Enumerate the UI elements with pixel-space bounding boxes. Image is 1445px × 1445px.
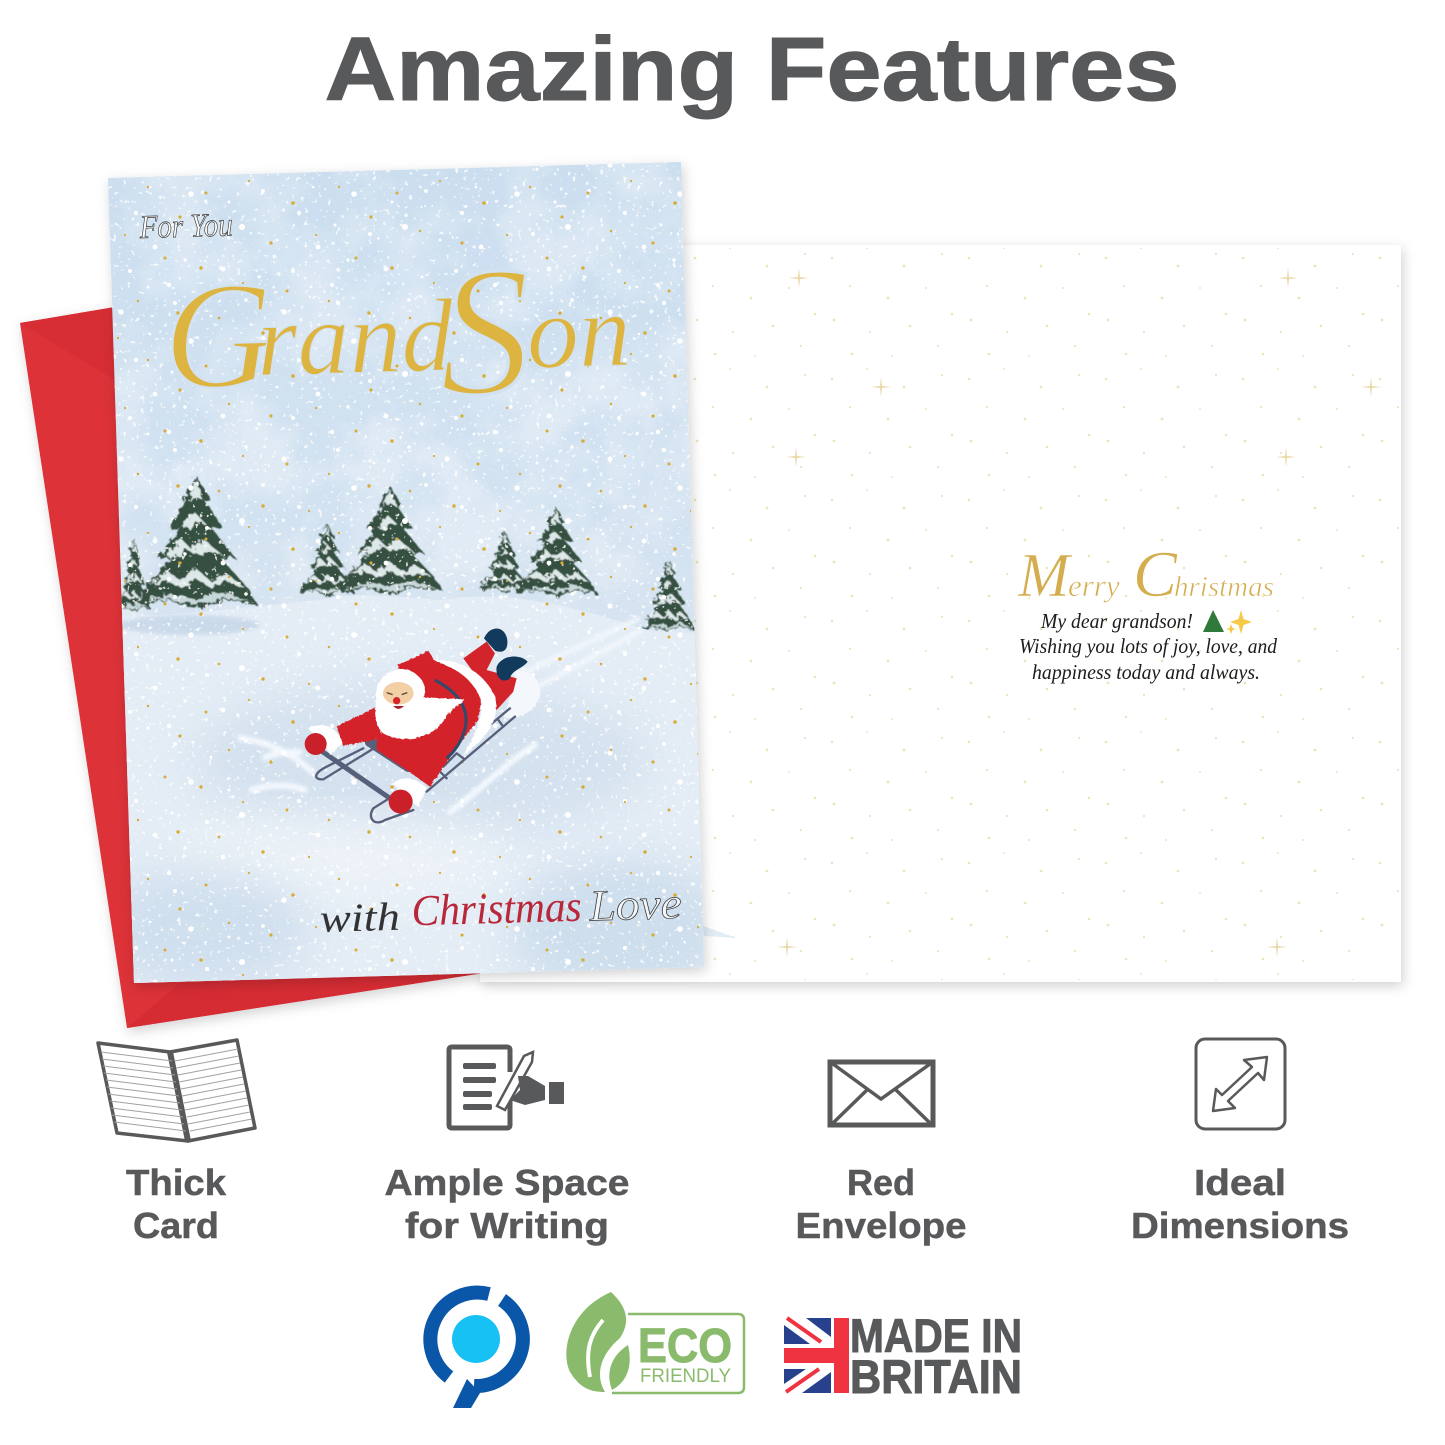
with christmas love: Love <box>588 879 682 930</box>
card fold sliver <box>703 926 737 938</box>
badge: eco friendly: FRIENDLY <box>640 1366 731 1387</box>
label <box>1131 1162 1349 1246</box>
mittens <box>305 733 327 755</box>
snow spray <box>503 670 541 718</box>
message heading: erry <box>1068 568 1127 603</box>
face <box>383 682 414 705</box>
snow ground <box>100 595 720 990</box>
message heading: M <box>1017 542 1073 610</box>
gold speckle <box>100 160 710 990</box>
title: Amazing Features <box>324 20 1180 120</box>
message body: Wishing you lots of joy, love, and <box>1019 634 1277 658</box>
label <box>796 1162 966 1246</box>
feature: ample space <box>384 1047 630 1246</box>
grandson heading: on <box>525 273 632 391</box>
red envelope <box>20 307 490 1028</box>
badge: blue logo <box>430 1293 523 1408</box>
gold stars <box>777 268 1381 957</box>
label: Thick <box>126 1162 227 1203</box>
grandson heading: G <box>161 250 276 421</box>
with christmas love: with <box>319 894 400 941</box>
card front <box>90 160 730 1000</box>
speckle background <box>684 248 1399 980</box>
right arm <box>337 707 382 746</box>
badge: made in britain <box>784 1309 1022 1403</box>
badge: eco friendly: ECO <box>638 1320 732 1373</box>
feature: ideal dimensions <box>1131 1039 1349 1246</box>
trees <box>118 475 695 632</box>
card inside panel <box>480 245 1401 982</box>
santa suit <box>377 651 482 787</box>
icon: union flag <box>784 1318 849 1393</box>
feature: thick card <box>98 1040 255 1246</box>
icon: envelope <box>830 1062 933 1125</box>
message body <box>1019 609 1277 684</box>
fur trim <box>433 660 496 757</box>
with christmas love <box>319 879 682 941</box>
santa on sled <box>305 629 541 822</box>
cuffs <box>308 725 427 807</box>
cloud texture <box>100 160 710 990</box>
icon: tree emoji <box>1203 610 1224 632</box>
icon: sparkles emoji <box>1226 610 1252 634</box>
label: Red <box>847 1162 915 1203</box>
for you text: For You <box>138 207 233 246</box>
icon: resize arrow <box>1196 1039 1285 1129</box>
badges <box>430 1292 1022 1408</box>
boots <box>484 629 528 681</box>
label: Envelope <box>796 1205 966 1246</box>
left leg <box>463 642 517 710</box>
label <box>384 1162 630 1246</box>
badge: eco friendly <box>566 1292 744 1393</box>
label: for Writing <box>405 1205 609 1246</box>
belt strap <box>435 680 466 758</box>
message body: happiness today and always. <box>1032 660 1260 684</box>
label: Ideal <box>1194 1162 1286 1203</box>
label <box>126 1162 227 1246</box>
badge: made in britain: BRITAIN <box>850 1350 1022 1403</box>
message heading: hristmas <box>1174 571 1274 603</box>
label: Ample Space <box>384 1162 630 1203</box>
message body: My dear grandson! <box>1040 609 1193 633</box>
feature: red envelope <box>796 1062 966 1246</box>
icon: writing hand <box>449 1047 564 1128</box>
label: Card <box>133 1205 219 1246</box>
icon: open card <box>98 1040 255 1141</box>
sled <box>316 708 515 822</box>
message heading: C <box>1133 538 1178 611</box>
sled tracks <box>525 618 642 688</box>
grandson heading: rand <box>255 278 456 398</box>
snow splashes <box>240 738 535 812</box>
with christmas love: Christmas <box>411 882 582 935</box>
grandson heading: S <box>436 228 533 434</box>
hat trim and beard <box>375 669 465 739</box>
white snowfall <box>100 160 710 990</box>
badge: made in britain: MADE IN <box>850 1309 1022 1362</box>
label: Dimensions <box>1131 1205 1349 1246</box>
